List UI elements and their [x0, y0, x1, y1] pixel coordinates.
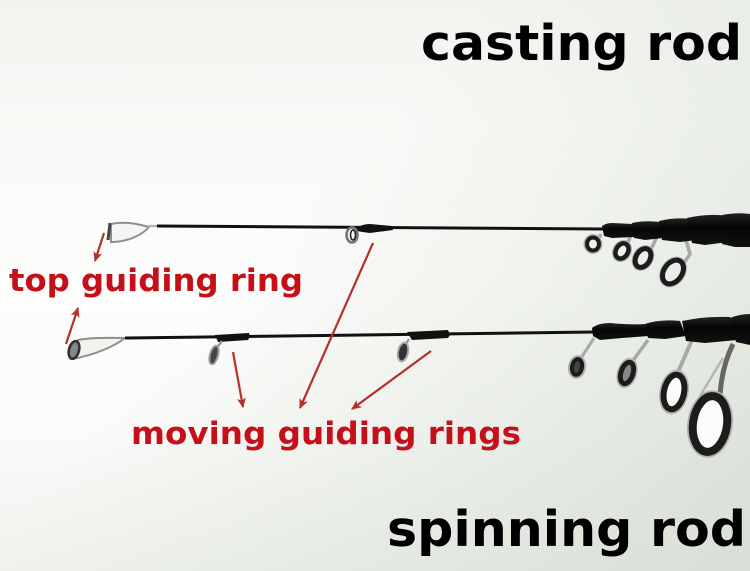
title: spinning rod: spinning rod [387, 501, 746, 558]
casting rod tip guide [108, 223, 158, 242]
casting rod handle sections [602, 213, 750, 247]
casting rod blank [157, 226, 604, 229]
spinning rod tip guide [67, 338, 125, 360]
arrow: spinning tip [66, 308, 78, 344]
spinning rod blank [125, 332, 594, 338]
spinning rod first moving guide [208, 333, 250, 365]
title: casting rod: casting rod [421, 15, 742, 72]
spinning rod second moving guide [396, 330, 450, 362]
spinning rod guide rings [568, 338, 735, 459]
spinning rod handle sections [592, 314, 750, 345]
casting rod [108, 213, 750, 291]
label: moving guiding rings: moving guiding rings [131, 416, 521, 452]
casting rod moving guide [346, 224, 393, 242]
label: top guiding ring: top guiding ring [9, 263, 303, 299]
arrow: second spinning moving guide [352, 351, 431, 409]
spinning rod [67, 314, 750, 459]
arrow: casting tip [95, 233, 104, 261]
arrow: casting moving guide [300, 243, 373, 408]
casting rod guide rings [585, 234, 691, 291]
arrow: first spinning moving guide [233, 352, 243, 407]
